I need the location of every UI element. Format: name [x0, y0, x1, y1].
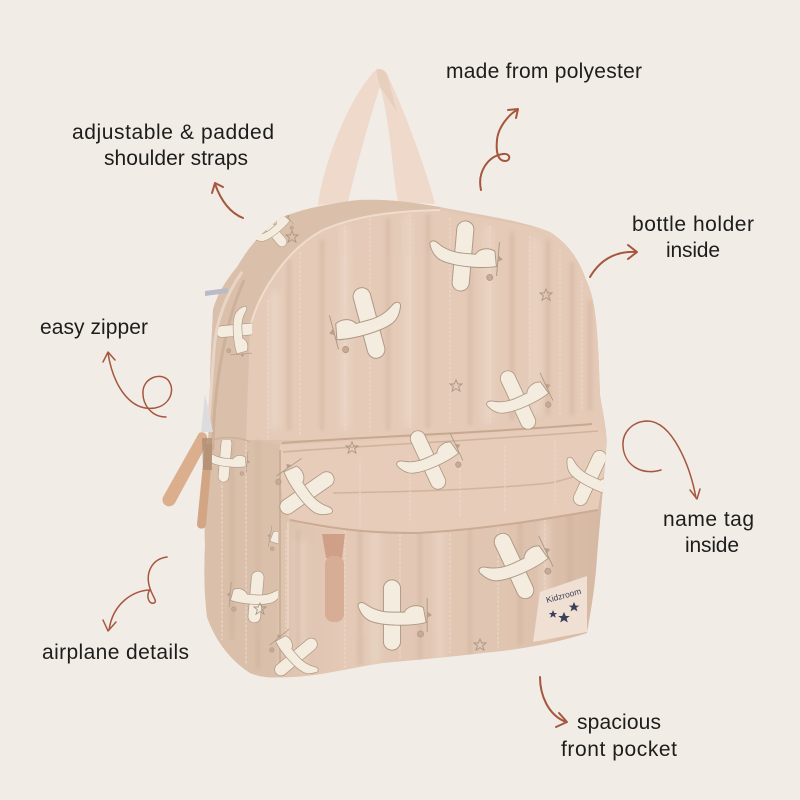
arrow: easy zipper — [103, 352, 172, 417]
arrow: bottle holder — [590, 245, 637, 277]
label: spacious front pocket: front pocket — [561, 738, 677, 761]
backpack illustration — [162, 69, 633, 700]
label: airplane details: airplane details — [42, 641, 189, 664]
label: adjustable and padded shoulder straps: shoulder straps — [104, 147, 248, 170]
label: name tag inside: inside — [685, 534, 739, 557]
side gusset — [200, 200, 440, 700]
arrow: name tag — [623, 421, 700, 499]
label: adjustable and padded shoulder straps — [72, 121, 274, 170]
sheen bands — [275, 214, 545, 670]
zipper pulls — [162, 394, 213, 529]
label: adjustable and padded shoulder straps: adjustable & padded — [72, 121, 274, 144]
arrow: airplane details — [103, 557, 167, 631]
bag body — [200, 200, 607, 700]
arrow: shoulder straps — [212, 183, 243, 218]
arrow: polyester — [480, 109, 518, 190]
arrow: front pocket — [540, 677, 567, 727]
zipper tag grey — [205, 288, 228, 296]
front pocket — [279, 424, 606, 672]
label: spacious front pocket — [561, 711, 677, 761]
brand label: Kidzroom — [545, 586, 582, 605]
seam — [250, 210, 440, 327]
label: bottle holder inside — [632, 213, 754, 262]
label: bottle holder inside: inside — [666, 239, 720, 262]
zipper tape — [208, 272, 242, 432]
airplane prints — [212, 215, 606, 676]
label: made from polyester: made from polyester — [446, 60, 642, 83]
handle — [318, 69, 435, 205]
label: easy zipper: easy zipper — [40, 316, 148, 339]
front panel — [246, 210, 606, 440]
brand label — [533, 576, 587, 642]
star prints — [254, 231, 552, 650]
label: bottle holder inside: bottle holder — [632, 213, 754, 236]
label: spacious front pocket: spacious — [577, 711, 661, 734]
label: name tag inside: name tag — [663, 508, 754, 531]
front pocket zipper pull — [322, 534, 345, 622]
quilted lines — [289, 214, 590, 430]
label: name tag inside — [663, 508, 754, 557]
